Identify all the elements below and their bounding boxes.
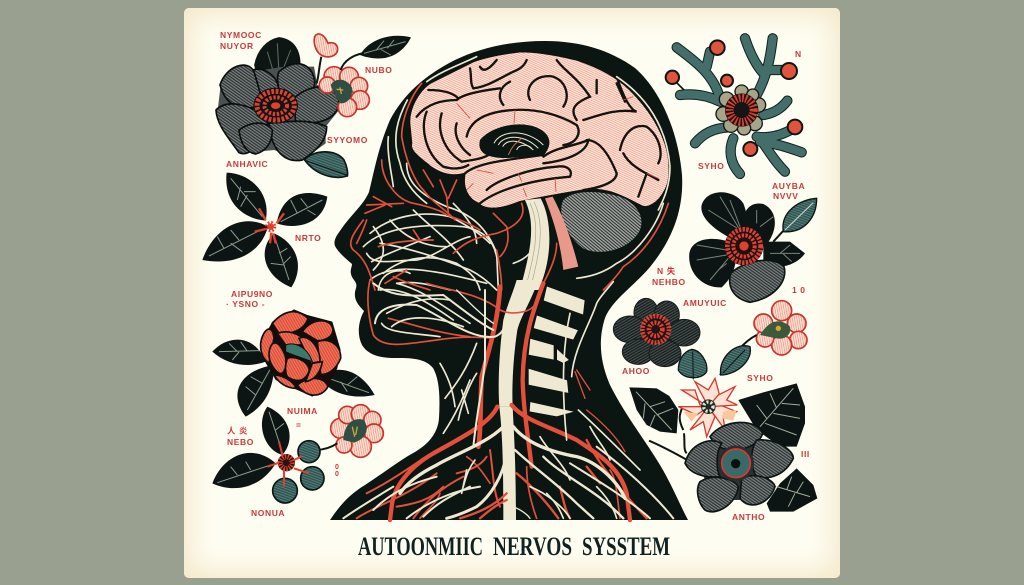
stamens outer [727,229,761,263]
label: nonua: NONUA [251,508,285,518]
title: AUTOONMIIC [358,532,483,561]
sprig flower petals [716,85,766,135]
dark four-leaf flower [202,173,327,287]
spinal trunk [499,280,538,407]
upper black leaf [360,36,411,58]
label: syho upper: SYHO [698,161,724,171]
dark flower core [649,323,662,336]
labels [220,30,810,522]
red hub dots [280,457,292,469]
red centre and filaments [255,208,284,243]
flower: teal branching sprig [666,38,817,302]
inner brain cavity with swirl [479,124,549,158]
label: side marks: III [801,449,810,459]
label: antho: ANTHO [732,512,765,522]
label: nubo: NUBO [365,65,392,75]
berry stalk [677,83,684,90]
sprig stamens [730,98,754,122]
red nerves upper [351,83,668,290]
label: nrto: NRTO [295,233,321,243]
teal leaf [783,198,817,232]
teal leaves [678,346,750,378]
label: vertical marks: 0 [335,464,340,471]
brain [351,52,670,290]
red hub [278,454,295,471]
leaf midrib [785,203,813,230]
teal leaf midribs [693,350,745,379]
spinal cord upper bundle [520,198,549,290]
cerebellum [561,192,641,252]
pink flower [331,405,383,457]
stamens mid [733,235,755,257]
pink spinal strand [545,197,578,270]
leaf behind flower [255,38,300,90]
cream nerve branches [343,282,673,518]
cerebral cortex [410,52,669,208]
sprig flower centre [725,93,758,127]
branches [677,38,802,174]
label: nymooc: NYMOOC [220,30,262,40]
flowers: lower right cluster [613,298,817,512]
peony centre [286,344,312,362]
stamens [257,91,294,120]
label: nebo: NEBO [227,437,254,447]
teal leaf [305,152,348,177]
red ring [722,449,750,478]
black flower veins [697,197,800,280]
bottom flower base [702,430,772,500]
label: cjk mark: 人 炎 [227,426,248,436]
label: side mark upper: 1 0 [792,285,806,295]
pink flower centre [331,80,352,103]
bottom flower petals [685,422,793,512]
black leaves [629,383,817,512]
head and torso silhouette [330,41,688,520]
bottom flower eye [718,445,754,481]
star centre [701,399,716,414]
pink flower [319,67,369,117]
stem to leaf [341,53,362,70]
label: small mark: = [296,420,302,430]
bud stem [317,57,321,83]
dark flower petals [613,298,700,367]
pink bud [314,34,338,57]
berries [666,40,802,156]
label: syho lower: SYHO [747,373,774,383]
petals [216,64,339,161]
vertebrae [528,286,585,417]
flower centre [253,88,298,124]
label: nuima: NUIMA [287,406,318,416]
label: vertical marks lower: 0 [335,471,340,478]
stem [773,230,784,242]
pink centre [760,321,790,339]
label: cjk mark right: N 失 [657,266,676,276]
peony petals [261,312,341,395]
teal leaf midrib [306,161,347,175]
red fold veins [457,97,658,197]
brain folds [417,60,661,203]
upper cream nerves [363,57,670,290]
flower: large grey anemone [202,34,411,287]
label: auyba: AUYBA [772,181,805,191]
pollen [776,326,781,331]
dark pupil [731,459,740,468]
round teal pads [273,441,324,503]
stem [317,443,337,450]
flower: red peony group [212,309,383,503]
star stamens [704,402,713,411]
pink flower centre [343,419,367,443]
lower nerve network [343,280,673,520]
red nerve trunks [357,280,647,520]
label: nehbo: NEHBO [652,277,686,287]
black flower petals [689,192,805,287]
spinal cord strands [525,202,540,290]
stamen core [271,102,280,109]
black flower centre [725,227,763,265]
petal base [217,65,339,160]
pollen [352,427,357,437]
poster panel [184,8,840,578]
label: n: N [795,49,802,59]
title: SYSSTEM [582,532,670,561]
red filaments [267,442,309,487]
label: ysno: · YSNO - [226,299,265,309]
striped petal [730,260,785,302]
dark flower base [632,307,679,354]
swirl of midbrain [494,133,543,155]
leaf veins [217,342,369,483]
label: nuyor: NUYOR [220,41,254,51]
leaf veins [267,43,291,73]
black leaf veins [636,388,810,507]
lower spinal trunk [499,407,516,520]
leaf veins [209,178,322,280]
stamen core [739,241,749,251]
dark flower stamens [642,316,669,343]
peony base [261,309,341,397]
label: ahoo: AHOO [622,366,650,376]
leaves [212,340,375,488]
label: aipuono: AIPU9NO [231,289,273,299]
label: syyomo: SYYOMO [327,135,368,145]
stems [649,335,757,459]
pollen [337,87,343,94]
label: amuyuic: AMUYUIC [683,298,727,308]
label: nvvv: NVVV [773,191,799,201]
star flower peach petals [683,410,737,422]
star flower [678,378,737,437]
leaf midrib [364,40,406,55]
pink flower [754,301,807,355]
inner stamens [264,97,287,114]
label: anhavic: ANHAVIC [226,159,268,169]
title: NERVOS [493,532,572,561]
